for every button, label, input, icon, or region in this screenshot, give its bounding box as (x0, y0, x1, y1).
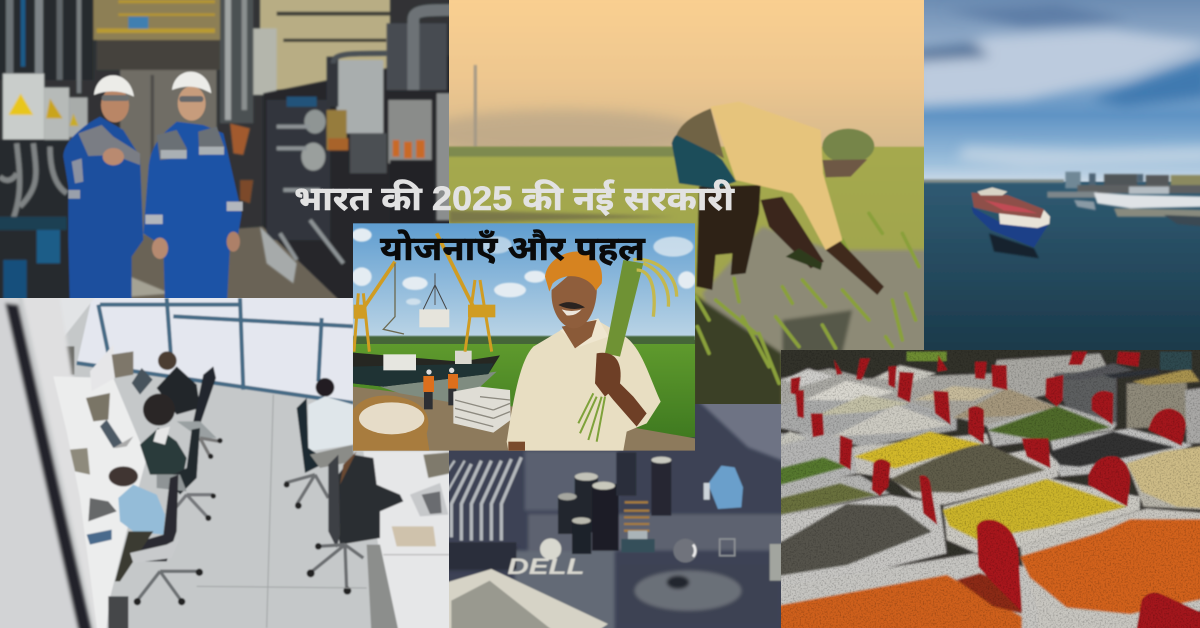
yellow cranes (354, 233, 495, 352)
rice bunch (578, 259, 677, 442)
person: white shirt (284, 378, 353, 509)
worker: woman in blue (143, 72, 243, 310)
flooded paddy and mud (449, 210, 936, 413)
panel: pulses and grains market photo (770, 340, 1200, 628)
left desks (53, 345, 153, 628)
hanging bags (419, 285, 449, 327)
waterfront skyline and docks (914, 172, 1200, 227)
container ship (971, 187, 1050, 258)
bent-over farmer (672, 102, 884, 295)
smiling man (507, 251, 661, 451)
piles of grains and lentils (773, 363, 1200, 628)
worker: man in blue (63, 75, 143, 310)
blue component (704, 466, 743, 509)
person: dark blazer (307, 451, 403, 595)
dock workers (423, 368, 458, 409)
rice sack (353, 395, 429, 451)
clouds (914, 3, 1200, 170)
heat sink fins (448, 457, 521, 541)
panel: farmer planting rice photo (422, 0, 936, 413)
panel: central farmer with rice and cargo ship image (352, 223, 695, 451)
stacked rice bags (453, 387, 511, 433)
large foil chip bracket (441, 569, 608, 628)
panel: motherboard circuit photo (449, 404, 781, 628)
panel: container ship in harbour photo (914, 0, 1200, 360)
electrical boxes (3, 73, 88, 142)
panel: industrial plant workers photo (0, 0, 460, 310)
chip marks (540, 538, 782, 581)
DELL logo text: DELL (507, 554, 585, 579)
windows (50, 291, 353, 403)
panel: office workspace photo (0, 288, 460, 628)
person at desk: dark jacket (157, 351, 220, 456)
title: second line: योजनाएँ और पहल (380, 229, 646, 268)
right desk (363, 451, 449, 628)
copper coil (621, 502, 655, 552)
red price tags (791, 352, 1200, 628)
person at desk: curly hair (140, 394, 213, 518)
right machinery (230, 10, 460, 310)
cargo ship (353, 351, 500, 387)
rice seedlings (696, 213, 919, 383)
title: first line: भारत की 2025 की नई सरकारी (294, 179, 735, 218)
capacitors (558, 452, 671, 554)
clouds (352, 228, 695, 305)
person at desk: light blue hoodie (109, 438, 223, 605)
blurred foreground wall (0, 298, 98, 628)
cables and lower left machinery (0, 140, 350, 310)
